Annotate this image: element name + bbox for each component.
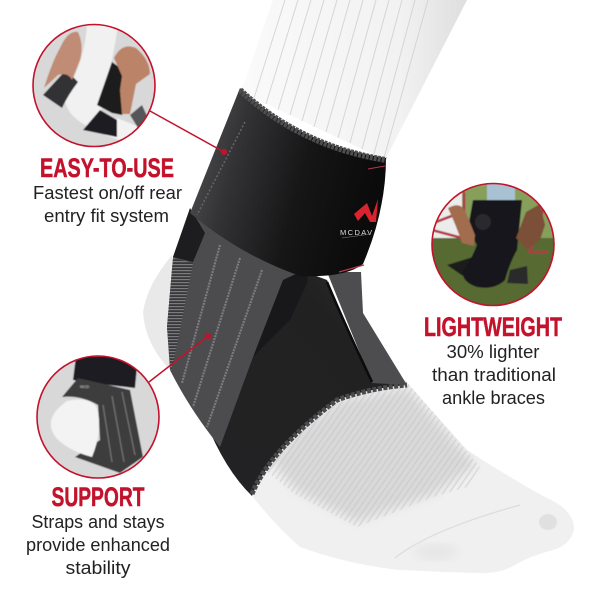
dark top mesh	[173, 208, 205, 262]
upper wrap cuff	[190, 88, 386, 276]
description: easy-to-use	[33, 183, 182, 226]
panel seam	[327, 282, 372, 382]
description: support	[26, 512, 170, 578]
leader line: support	[149, 333, 211, 382]
inset circle: hands pulling brace on	[30, 20, 160, 150]
inset circle: brace on turf	[430, 180, 556, 310]
heading: easy-to-use: EASY-TO-USE	[40, 153, 174, 183]
inset circle: brace rear view	[35, 354, 161, 480]
product photo: ankle brace on foot	[143, 0, 574, 573]
heading: support: SUPPORT	[52, 482, 145, 512]
description: lightweight: 30% lighter	[446, 342, 540, 362]
foot rim seam	[252, 385, 407, 494]
dark mesh gusset	[253, 270, 308, 357]
striped side mesh	[167, 258, 193, 372]
brace logo	[340, 199, 378, 238]
description: lightweight: ankle braces	[442, 388, 545, 408]
white heel of sock	[143, 255, 172, 372]
grey outer panel	[327, 272, 407, 385]
description: lightweight: than traditional	[432, 365, 556, 385]
description: lightweight	[432, 342, 556, 408]
striped support strap	[167, 208, 300, 447]
sock forefoot	[253, 380, 574, 573]
description: support: Straps and stays	[32, 512, 164, 532]
inset circle: brace rear view: MCD	[80, 384, 89, 389]
description: easy-to-use: entry fit system	[44, 206, 169, 226]
sock leg	[241, 0, 467, 160]
description: support: provide enhanced	[26, 535, 170, 555]
lower neoprene panel	[205, 270, 407, 496]
leader line: easy-to-use	[150, 111, 227, 155]
description: easy-to-use: Fastest on/off rear	[33, 183, 182, 203]
brace logo: MCDAV	[340, 228, 374, 237]
description: support: stability	[66, 558, 130, 578]
